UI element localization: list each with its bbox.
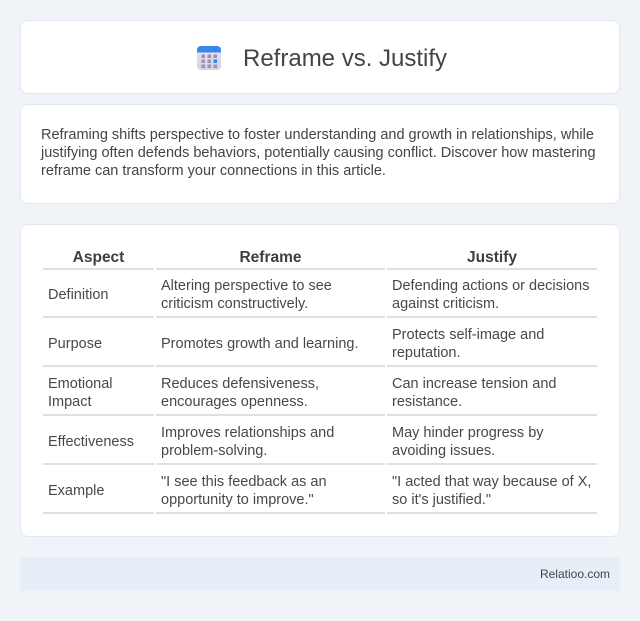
cell: Justify emotional impact: Can increase tension and <box>392 376 556 392</box>
header: Justify: Justify <box>467 249 517 266</box>
cell: Justify effectiveness: May hinder progress by <box>392 425 544 441</box>
cell: Justify definition: Defending actions or decisions <box>392 278 589 294</box>
cell: Justify emotional impact: resistance. <box>392 394 462 410</box>
icon: calendar <box>197 46 221 70</box>
cell: Reframe example: "I see this feedback as an <box>161 474 327 490</box>
panel: title card <box>20 20 620 94</box>
cell: Reframe definition: Altering perspective to see <box>161 278 332 294</box>
panel: comparison table card <box>20 224 620 537</box>
row label: Purpose: Purpose <box>48 336 102 352</box>
cell: Justify example: so it's justified." <box>392 492 491 508</box>
row label: Emotional Impact <box>48 376 112 410</box>
cell: Reframe example: opportunity to improve." <box>161 492 314 508</box>
row label: Effectiveness: Effectiveness <box>48 434 134 450</box>
header: Reframe: Reframe <box>239 249 302 266</box>
cell: Reframe emotional impact: Reduces defensiveness, <box>161 376 319 392</box>
cell: Reframe effectiveness <box>161 425 334 459</box>
row label: Emotional Impact: Impact <box>48 394 92 410</box>
cell: Reframe purpose: Promotes growth and learning. <box>161 336 358 352</box>
cell: Reframe effectiveness: problem-solving. <box>161 443 267 459</box>
cell: Reframe emotional impact: encourages openness. <box>161 394 308 410</box>
cell: Justify purpose: Protects self-image and <box>392 327 544 343</box>
title: Reframe vs. Justify <box>243 45 447 72</box>
footer bar <box>20 557 620 591</box>
cell: Reframe definition <box>161 278 332 312</box>
row label: Example: Example <box>48 483 104 499</box>
cell: Justify effectiveness: avoiding issues. <box>392 443 495 459</box>
cell: Justify example <box>392 474 591 508</box>
cell: Reframe emotional impact <box>161 376 319 410</box>
intro paragraph <box>40 127 596 179</box>
header: Reframe <box>156 248 385 270</box>
cell: Justify purpose <box>392 327 544 361</box>
cell: Reframe example <box>161 474 327 508</box>
header: Justify <box>387 248 597 270</box>
header: Aspect <box>43 248 154 270</box>
cell: Justify example: "I acted that way because of X, <box>392 474 591 490</box>
cell: Reframe definition: criticism constructively. <box>161 296 308 312</box>
row label: Emotional Impact: Emotional <box>48 376 112 392</box>
intro paragraph: Reframing shifts perspective to foster understanding and growth in relationships, while <box>41 127 594 143</box>
row label: Definition: Definition <box>48 287 108 303</box>
cell: Reframe effectiveness: Improves relationships and <box>161 425 334 441</box>
cell: Justify emotional impact <box>392 376 556 410</box>
cell: Justify effectiveness <box>392 425 544 459</box>
header: Aspect: Aspect <box>73 249 124 266</box>
cell: Justify definition: against criticism. <box>392 296 499 312</box>
intro paragraph: justifying often defends behaviors, potentially causing conflict. Discover how mastering <box>41 145 596 161</box>
panel: intro text <box>20 104 620 204</box>
cell: Justify purpose: reputation. <box>392 345 461 361</box>
intro paragraph: reframe can transform your connections in this article. <box>41 163 386 179</box>
cell: Justify definition <box>392 278 589 312</box>
footer brand text: Relatioo.com <box>540 567 610 581</box>
